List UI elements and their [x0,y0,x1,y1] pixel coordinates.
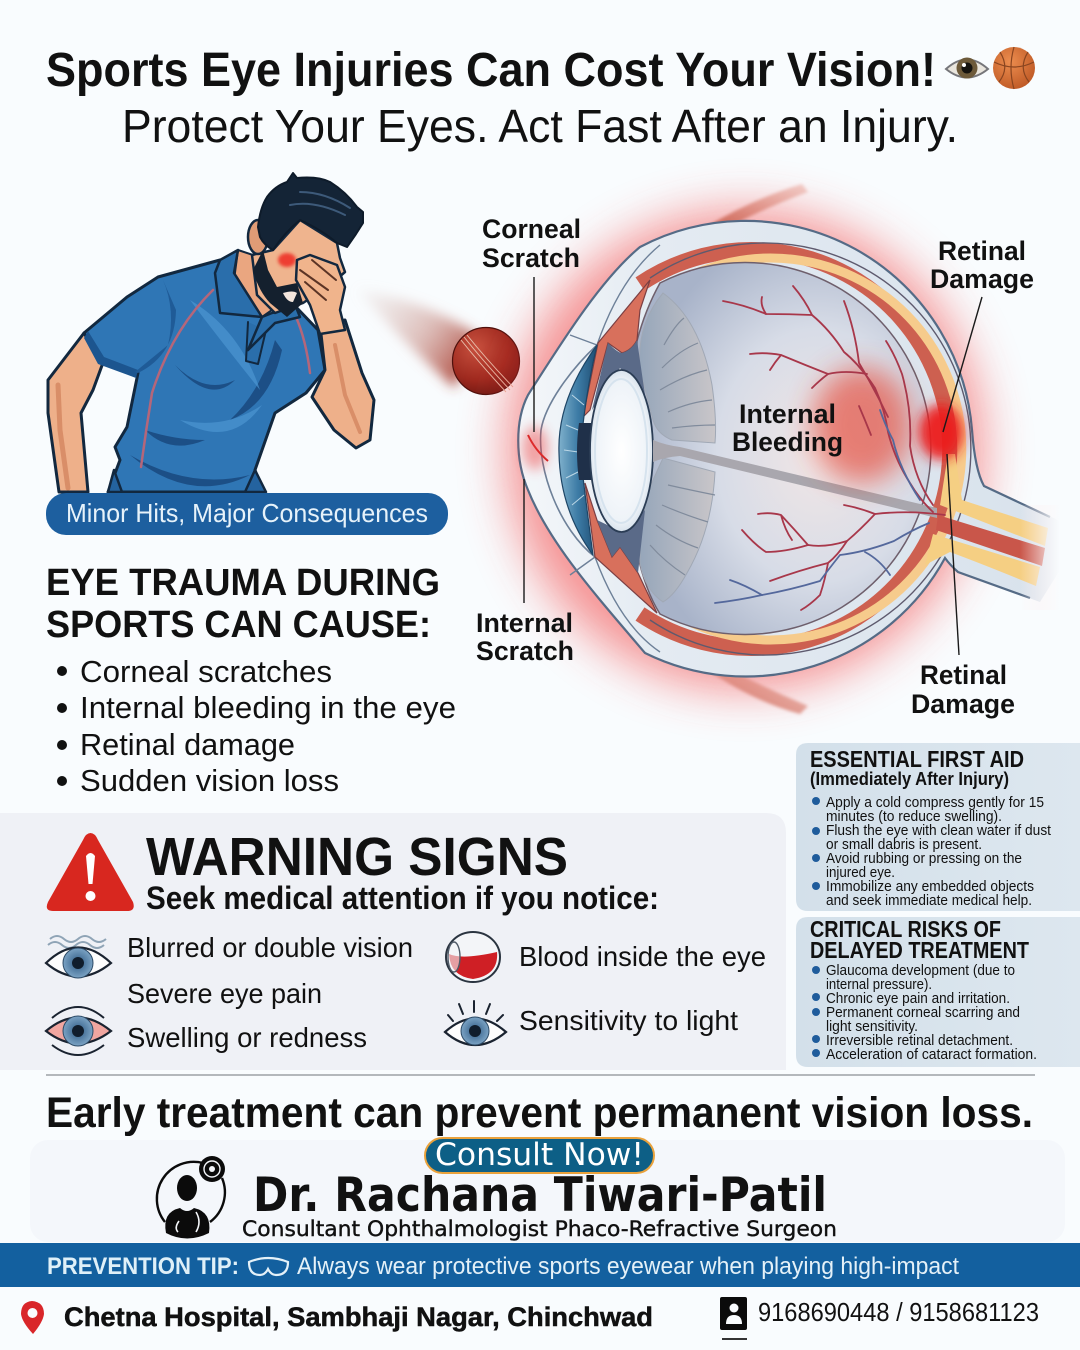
motion trail [358,290,478,388]
nerve fade [1020,505,1060,610]
icon: red swollen eye [46,1007,111,1055]
text: severe pain: Severe eye pain [127,978,322,1009]
label: corneal scratch [482,214,581,432]
collar [215,250,262,317]
title: Sports Eye Injuries Can Cost Your Vision! [46,44,936,97]
panel: critical risks: DELAYED TREATMENT [810,937,1029,963]
title [46,44,958,152]
icon: blood in eye [446,932,500,982]
sclera fill [518,221,1060,677]
panel: critical risks: Chronic eye pain and irritation. [826,991,1010,1007]
list: trauma causes: Internal bleeding in the eye [80,690,456,725]
extraocular muscle bottom [705,668,808,714]
icon: light sensitive eye [445,1001,506,1045]
icon: location pin [21,1301,44,1334]
doctor name: Dr. Rachana Tiwari-Patil [253,1168,827,1223]
label: internal scratch: Internal [476,608,573,638]
left arm [48,333,104,492]
list: trauma causes: Corneal scratches [80,654,332,689]
icon: goggles [249,1258,288,1275]
panel: essential first aid: Apply a cold compress gently for 15 [826,795,1044,811]
eye anatomy diagram [507,184,1060,714]
label: retinal damage top: Retinal [938,236,1026,266]
icon: warning triangle [47,833,134,911]
sclera outline [518,221,1050,677]
logo: doctor with eye [157,1156,225,1238]
banner: prevention tip: PREVENTION TIP: [47,1253,239,1280]
text: blood inside: Blood inside the eye [519,941,766,972]
optic nerve sheath yellow [940,454,1048,546]
neck [234,250,272,317]
panel: critical risks: internal pressure). [826,977,932,993]
hair [258,173,363,250]
placket [246,322,266,364]
retinal hemorrhage [919,404,963,460]
retina cream band [662,258,962,640]
heading: eye trauma [46,562,440,646]
extraocular muscle top [705,184,808,228]
label: retinal damage bottom: Retinal [920,660,1007,690]
forearm [312,320,374,448]
panel: critical risks [796,916,1080,1067]
title: Protect Your Eyes. Act Fast After an Injury. [122,100,958,152]
text: blurred vision: Blurred or double vision [127,932,413,963]
zonule dark regions [592,340,645,410]
doctor title: Consultant Ophthalmologist Phaco-Refractive Surgeon [242,1217,837,1241]
heading: eye trauma: SPORTS CAN CAUSE: [46,604,431,646]
hyaloid canal [653,440,937,518]
ciliary body upper [639,293,716,443]
button: consult now: Consult Now! [435,1137,644,1173]
label: corneal scratch: Corneal [482,214,581,244]
statement: early treatment: Early treatment can prevent permanent vision loss. [46,1089,1033,1137]
iris [559,345,597,555]
blood vessels [715,286,945,610]
text: sensitivity: Sensitivity to light [519,1005,738,1036]
icon: phone book [720,1297,747,1330]
pill: minor hits: Minor Hits, Major Consequences [66,498,428,528]
illustration: injured athlete [48,173,374,492]
label: retinal damage bottom [911,454,1015,719]
optic nerve red centre [936,515,1045,566]
label: retinal damage top: Damage [930,264,1034,294]
panel: essential first aid: Immobilize any embedded objects [826,879,1034,895]
ciliary body lower [640,458,715,602]
panel: critical risks: Permanent corneal scarring and [826,1005,1020,1021]
panel: essential first aid [796,743,1080,911]
icon: eye in title [946,58,988,78]
sleeve fold and shirt shadows [84,331,138,378]
banner: prevention tip: Always wear protective sports eyewear when playing high-impact [297,1253,959,1280]
pill: minor hits [46,493,448,535]
banner: prevention tip [0,1243,1080,1287]
label: retinal damage top [930,236,1034,432]
warning heading: WARNING SIGNS [146,827,568,887]
label: internal bleeding [732,399,843,457]
label: internal scratch [476,479,574,666]
eye injury red glow [278,253,296,267]
label: internal bleeding: Internal [739,399,836,429]
inner cornea line [541,345,597,557]
address: Chetna Hospital, Sambhaji Nagar, Chinchwad [64,1302,653,1332]
vitreous body [634,262,931,634]
label: corneal scratch: Scratch [482,243,580,273]
panel: essential first aid: Flush the eye with clean water if dust [826,823,1051,839]
ear [248,220,268,254]
panel: essential first aid: or small dabris is present. [826,837,982,853]
label: internal scratch: Scratch [476,636,574,666]
label: internal bleeding: Bleeding [732,427,843,457]
panel: critical risks: Acceleration of cataract formation. [826,1047,1037,1063]
cricket ball [452,328,520,394]
panel: essential first aid: Avoid rubbing or pressing on the [826,851,1022,867]
panel: critical risks: light sensitivity. [826,1019,918,1035]
polo shirt [84,260,325,492]
head [252,220,345,313]
panel: warning signs [0,813,786,1070]
label: retinal damage bottom: Damage [911,689,1015,719]
ciliary muscle bottom [585,483,657,613]
list: trauma causes: Sudden vision loss [80,763,339,798]
panel: essential first aid: minutes (to reduce swelling). [826,809,1002,825]
phone numbers: 9168690448 / 9158681123 [758,1297,1039,1327]
panel: essential first aid: ESSENTIAL FIRST AID [810,746,1024,772]
panel: essential first aid: injured eye. [826,865,895,881]
optic nerve lower yellow [925,534,1040,586]
choroid band [640,250,950,648]
icon: blurred vision eye [46,936,111,978]
list: trauma causes: Retinal damage [80,727,295,762]
panel: critical risks: Irreversible retinal detachment. [826,1033,1013,1049]
hand [296,255,345,334]
beard [253,250,303,317]
shorts [108,470,266,492]
text: swelling: Swelling or redness [127,1022,367,1053]
panel: critical risks: Glaucoma development (due to [826,963,1015,979]
lens [590,370,653,532]
ciliary ribs [650,318,715,575]
panel: essential first aid: (Immediately After Injury) [810,769,1009,789]
heading: eye trauma: EYE TRAUMA DURING [46,562,440,604]
list: trauma causes [57,654,456,798]
warning heading [146,827,659,916]
icon: basketball [993,47,1035,89]
hemorrhage red glow [812,367,912,483]
warning heading: Seek medical attention if you notice: [146,880,659,916]
doctor card background [30,1140,1065,1242]
panel: critical risks: CRITICAL RISKS OF [810,916,1001,942]
red halo [507,210,983,690]
pupil [577,423,592,480]
corneal scratch mark [528,435,548,461]
panel: essential first aid: and seek immediate medical help. [826,893,1032,909]
ciliary muscle top [583,280,650,417]
